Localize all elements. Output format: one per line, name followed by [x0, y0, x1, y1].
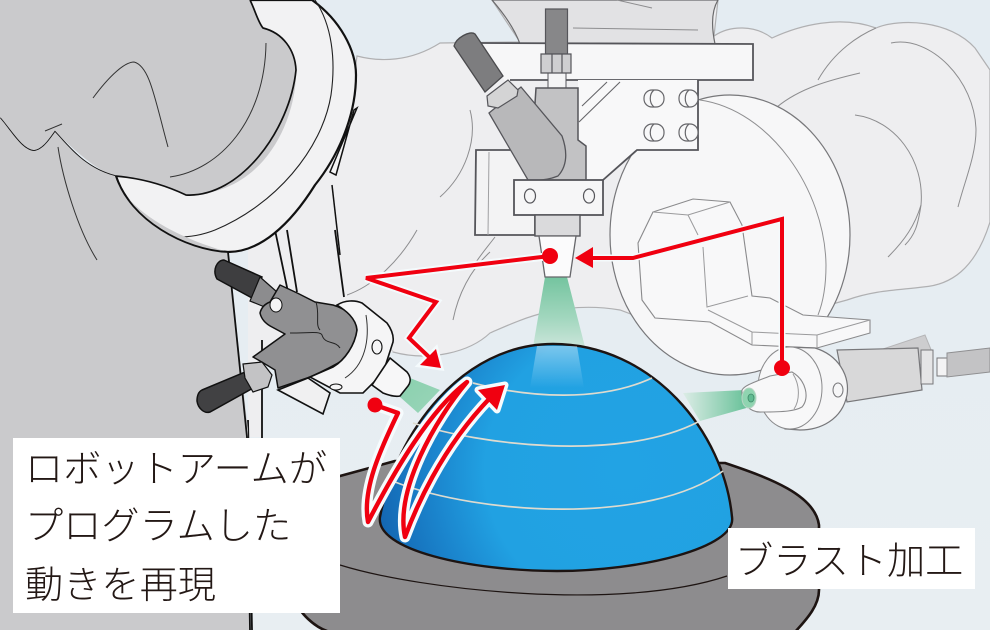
- bolts: [644, 90, 698, 141]
- red zigzag arrow on dome: [367, 382, 505, 537]
- collar disc: [785, 347, 847, 430]
- callout: robot arm text: ロボットアームが: [25, 448, 327, 491]
- blue dome workpiece: [380, 344, 732, 571]
- Y-shaped body: [253, 285, 357, 388]
- arrowhead: [575, 247, 593, 268]
- lower bracket: [278, 378, 330, 414]
- rear hose: [880, 335, 932, 365]
- grey housing: [530, 88, 586, 181]
- left robot arm: [0, 0, 393, 630]
- top nut: [250, 277, 277, 310]
- nozzle tip: [539, 236, 576, 277]
- bottom rod: [197, 372, 255, 412]
- nozzle assembly: centre: [454, 9, 753, 347]
- nozzle tip: [372, 358, 410, 396]
- red arrow: left nozzle motion: [366, 248, 558, 368]
- large round flange: [610, 95, 850, 375]
- bottom nut: [243, 362, 272, 392]
- neck: [535, 215, 580, 236]
- red arrow: right nozzle motion: [575, 219, 790, 376]
- mounting plate: [578, 80, 698, 180]
- callout: robot arm text: 動きを再現: [25, 564, 216, 607]
- tube: [837, 348, 922, 402]
- angled tube: [489, 87, 566, 180]
- spray beam right: [683, 390, 750, 421]
- callout: blast processing: [728, 528, 975, 589]
- arm bracket block: [638, 199, 870, 348]
- left block: [475, 150, 535, 235]
- top rod: [215, 260, 262, 298]
- nozzle cone: [742, 372, 806, 412]
- upper body panel: [492, 0, 718, 44]
- callout: blast processing: ブラスト加工: [735, 540, 963, 583]
- rear arm silhouette centre: [340, 0, 990, 356]
- spray beam centre: [533, 277, 585, 347]
- angled nut: [487, 80, 518, 108]
- nozzle tip: [742, 388, 756, 408]
- start dot: [368, 398, 382, 412]
- grey lower body: [0, 118, 250, 630]
- spray highlight on dome: [530, 346, 584, 388]
- angled rod: [454, 33, 503, 92]
- background robot arm, faded: [340, 0, 990, 375]
- callout: robot arm text: プログラムした: [25, 505, 291, 548]
- arrowhead: [420, 349, 441, 368]
- mounting bar: [480, 43, 753, 81]
- rod: [947, 348, 990, 377]
- top nut: [541, 54, 571, 73]
- top rod: [546, 9, 568, 54]
- right nut: [921, 350, 933, 384]
- body contour lines: [45, 43, 266, 260]
- start dot: [542, 248, 558, 264]
- arrowhead: [478, 385, 505, 410]
- clamp: [514, 180, 603, 215]
- collar: [310, 301, 393, 393]
- panel behind robot: [248, 110, 393, 437]
- callout: robot arm text: [13, 438, 340, 613]
- nozzle assembly: left: [197, 260, 440, 414]
- grey arm body: [0, 0, 296, 195]
- nozzle assembly: right: [638, 199, 990, 430]
- white flange: [116, 0, 356, 252]
- dome latitude lines: [395, 378, 723, 509]
- side bracket: [330, 108, 357, 175]
- work table base: [296, 461, 819, 630]
- stem: [937, 358, 947, 376]
- start dot: [774, 360, 790, 376]
- right arm blob lines: [347, 0, 976, 320]
- spray beam left: [400, 378, 440, 413]
